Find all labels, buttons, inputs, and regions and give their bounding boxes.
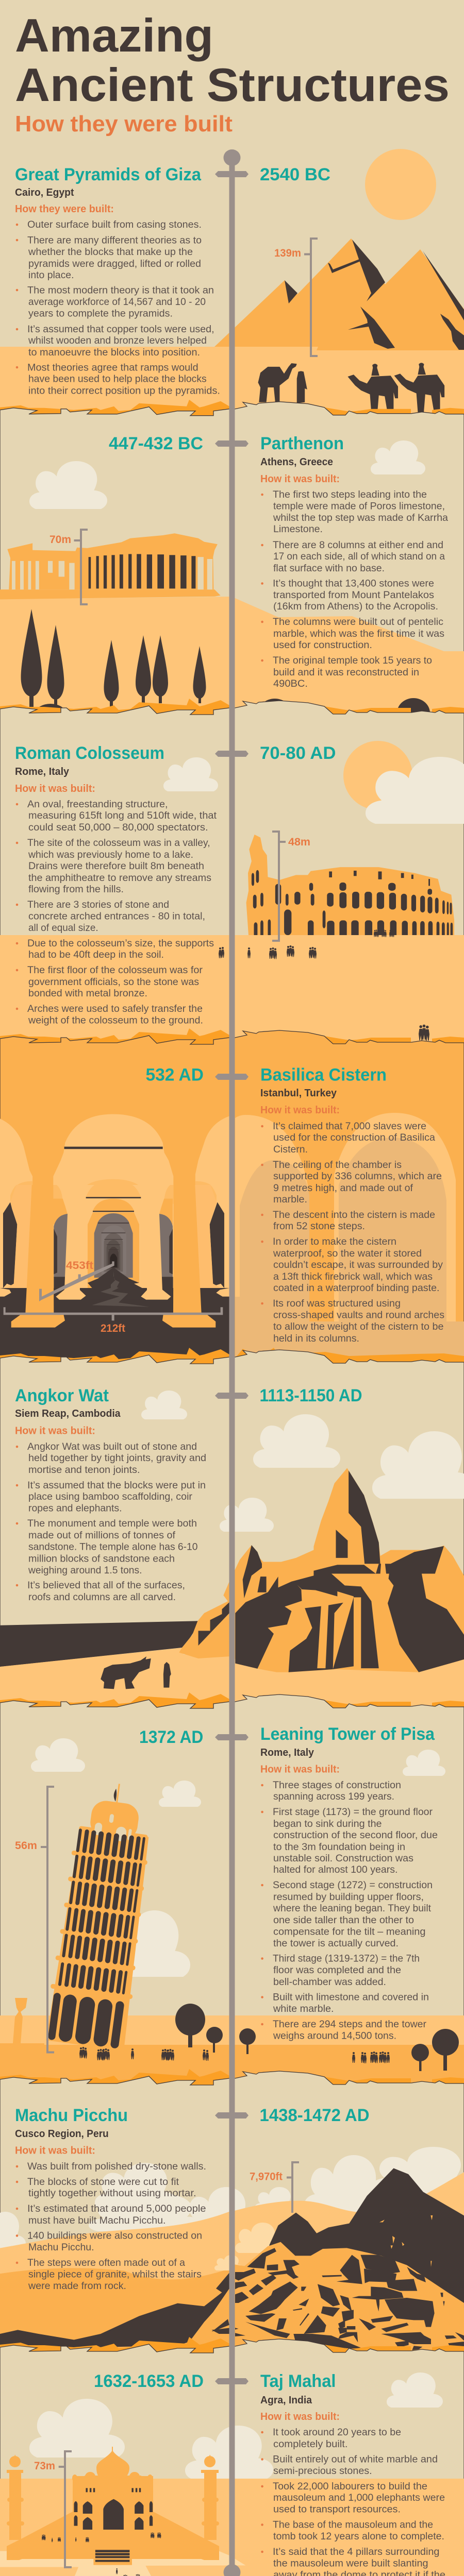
date: 532 AD (145, 1065, 204, 1085)
windows and stairs (74, 2488, 153, 2565)
bullet list: average workforce of 14,567 and 10 - 20 (28, 297, 206, 308)
subtitle: How they were built (15, 111, 233, 137)
tower (43, 1778, 160, 2051)
bullet list: The ceiling of the chamber is (273, 1160, 402, 1171)
height bracket: 48m: 48m (288, 836, 310, 848)
bullet list: Most theories agree that ramps would (27, 363, 198, 373)
bullet list: sandstone. The temple alone has 6-10 (28, 1542, 197, 1553)
illustration: Parthenon (0, 440, 464, 728)
colosseum building (246, 835, 454, 940)
arches right of timeline (235, 1113, 464, 1365)
bullet list: 17 on each side, all of which stand on a (273, 551, 445, 562)
height bracket: 73m: 73m (34, 2460, 55, 2472)
location: Athens, Greece (260, 456, 333, 468)
bullet list: place using bamboo scaffolding, coir (28, 1492, 193, 1502)
panel: Taj Mahal (94, 2371, 445, 2576)
dimension label: 453ft: 453ft (66, 1260, 93, 1272)
panel: Leaning Tower of Pisa (139, 1724, 438, 2041)
bullet list: It’s estimated that around 5,000 people (27, 2204, 206, 2214)
camels and travellers (258, 363, 444, 414)
cloud (31, 1738, 85, 1772)
right minaret (201, 2455, 219, 2540)
bullet list: where the leaning began. They built (273, 1903, 432, 1914)
cloud (371, 440, 425, 474)
upper arches left of timeline (0, 1114, 229, 1194)
height bracket: 139m: 139m (274, 247, 301, 259)
illustration: Leaning Tower of Pisa (0, 1738, 464, 2086)
ground strip (0, 2337, 464, 2355)
title: Amazing (15, 10, 213, 62)
bullet list: Second stage (1272) = construction (273, 1880, 433, 1891)
bullet list: Its roof was structured using (273, 1298, 401, 1309)
height bracket: 56m (15, 1786, 54, 2054)
bullet list: Machu Picchu. (28, 2242, 94, 2253)
bullet list: It’s assumed that copper tools were used, (27, 324, 214, 335)
height bracket: 70m: 70m (49, 534, 71, 546)
bullet list: into their correct position up the pyramids. (28, 386, 220, 397)
bullet list: It’s claimed that 7,000 slaves were (273, 1121, 426, 1132)
bullet list: the amphitheatre to remove any streams (28, 873, 211, 884)
bullet list: The descent into the cistern is made (273, 1210, 435, 1221)
bullet list: The columns were built out of pentelic (273, 617, 443, 628)
height bracket: 70m (49, 529, 88, 605)
bullet list: build and it was reconstructed in (273, 667, 419, 678)
hill ground (0, 597, 464, 721)
date: 1113-1150 AD (260, 1386, 362, 1405)
bullet list: temple were made of Poros limestone, (273, 501, 445, 512)
bullet list: The most modern theory is that it took an (27, 285, 214, 296)
heading: Machu Picchu (15, 2106, 128, 2125)
mausoleum (7, 2447, 219, 2560)
location: Agra, India (260, 2395, 312, 2406)
cloud (29, 461, 107, 509)
subheading: How they were built: (15, 204, 114, 215)
date: 1632-1653 AD (94, 2371, 204, 2391)
dimension lines (4, 1261, 223, 1320)
bullet list: spanning across 199 years. (273, 1791, 394, 1802)
bullet list: First stage (1173) = the ground floor (273, 1807, 433, 1818)
bullet list: the tower is actually curved. (273, 1938, 399, 1949)
pyramids (214, 239, 464, 350)
subheading: How it was built: (15, 783, 95, 794)
bullet list: Was built from polished dry-stone walls. (27, 2161, 206, 2172)
cloud (387, 2372, 443, 2408)
bushes (36, 698, 430, 728)
bullet list: single piece of granite, whilst the stairs (28, 2269, 202, 2280)
bullet list: completely built. (273, 2439, 347, 2450)
illustration: Taj Mahal (0, 2372, 464, 2576)
cloud (403, 1750, 445, 1776)
bullet list: weighs around 14,500 tons. (273, 2031, 396, 2041)
bullet list: Outer surface built from casing stones. (27, 219, 202, 230)
bullet list: It’s thought that 13,400 stones were (273, 578, 434, 589)
bullet list: flat surface with no base. (273, 563, 385, 574)
title: Ancient Structures (15, 59, 450, 111)
bullet list: construction of the second floor, due (273, 1830, 438, 1841)
bullet list: marble. (273, 1194, 307, 1205)
hall, columns and dimension lines (0, 1185, 229, 1365)
cloud (29, 2399, 125, 2458)
visitors (79, 2047, 390, 2063)
bullet list: ropes and elephants. (28, 1503, 122, 1514)
bullet list: had to be 40ft deep in the soil. (28, 950, 164, 960)
height bracket: 56m: 56m (15, 1840, 37, 1852)
panel: Angkor Wat (15, 1386, 362, 1603)
ground edge (0, 2339, 464, 2576)
bullet list: The first floor of the colosseum was for (27, 965, 203, 976)
bullet list: cross-shaped vaults and round arches (273, 1310, 444, 1321)
panel: Basilica Cistern (145, 1065, 444, 1344)
height bracket: 139m (274, 238, 318, 357)
height bracket: 7,970ft: 7,970ft (250, 2171, 283, 2182)
bullet list: one side taller than the other to (273, 1915, 414, 1926)
bullet list: The first two steps leading into the (273, 489, 427, 500)
bullet list: It’s assumed that the blocks were put in (27, 1480, 206, 1491)
bullet list (261, 2427, 445, 2576)
bullet list: The steps were often made out of a (27, 2258, 185, 2268)
bullet list: There are 294 steps and the tower (273, 2019, 427, 2030)
bullet list: Third stage (1319-1372) = the 7th (273, 1954, 420, 1964)
icon: sun (343, 741, 412, 810)
ground edge (0, 402, 464, 826)
bullet list: from 52 stone steps. (273, 1221, 365, 1232)
illustration: Basilica Cistern (0, 1113, 464, 1365)
ox and herder (101, 1656, 171, 1689)
bullet list: bell-chamber was added. (273, 1977, 386, 1988)
ground edge (0, 701, 464, 1125)
subheading: How it was built: (15, 1426, 95, 1437)
ground (0, 935, 464, 1046)
bullet list: have been used to help place the blocks (28, 374, 207, 385)
dimension label: 212ft: 212ft (101, 1323, 125, 1334)
cloud (366, 757, 464, 824)
bullet list: There are 3 stories of stone and (27, 900, 169, 910)
bullet list: bonded with metal bronze. (28, 988, 147, 999)
timeline (215, 149, 248, 2576)
bullet list: whilst wooden and bronze levers helped (28, 335, 207, 346)
panel: Roman Colosseum (15, 743, 336, 1026)
bullet list: Took 22,000 labourers to build the (273, 2481, 427, 2492)
ground edge (0, 1694, 464, 2119)
title (15, 10, 450, 111)
bullet list: held together by tight joints, gravity and (28, 1453, 206, 1464)
illustration: Angkor Wat (0, 1391, 464, 1714)
cloud (159, 1781, 201, 1807)
bullet list: flowing from the hills. (28, 884, 124, 895)
height bracket: 48m (272, 831, 310, 942)
bullet list: years to complete the pyramids. (28, 308, 173, 319)
heading: Great Pyramids of Giza (15, 165, 202, 184)
bullet list: supported by 336 columns, which are (273, 1171, 442, 1182)
bullet list (16, 2161, 206, 2292)
location: Cusco Region, Peru (15, 2128, 109, 2140)
location: Siem Reap, Cambodia (15, 1408, 121, 1419)
bullet list: Arches were used to safely transfer the (27, 1004, 203, 1014)
cloud (253, 1414, 340, 1468)
bullet list: could seat 50,000 – 80,000 spectators. (28, 822, 208, 833)
floor cracks (92, 1271, 150, 1307)
icon: sun (365, 149, 436, 220)
location: Rome, Italy (15, 766, 70, 777)
ground bands (0, 2015, 464, 2086)
bullet list: Due to the colosseum’s size, the supports (27, 938, 214, 949)
bullet list: marble, which was the first time it was (273, 629, 444, 639)
bullet list: It’s said that the 4 pillars surrounding (273, 2547, 439, 2557)
bullet list: must have built Machu Picchu. (28, 2215, 166, 2226)
bullet list: halted for almost 100 years. (273, 1865, 398, 1875)
bullet list: began to sink during the (273, 1819, 382, 1829)
bullet list: The original temple took 15 years to (273, 655, 432, 666)
cloud (185, 2426, 273, 2479)
bullet list: a 13ft thick firebrick wall, which was (273, 1272, 433, 1282)
subheading: How it was built: (260, 2411, 340, 2422)
bullet list: mortise and tenon joints. (28, 1465, 140, 1476)
location: Istanbul, Turkey (260, 1088, 337, 1099)
bullet list: semi-precious stones. (273, 2466, 372, 2477)
bullet list: transported from Mount Pantelakos (273, 590, 434, 601)
bullet list: the mausoleum were built slanting (273, 2558, 428, 2569)
bullet list: all of equal size. (28, 923, 98, 934)
date: 70-80 AD (260, 743, 336, 763)
ruins (234, 2215, 464, 2353)
heading: Parthenon (260, 434, 344, 453)
subheading: How it was built: (260, 1764, 340, 1775)
bullet list: to allow the weight of the cistern to be (273, 1321, 443, 1332)
bullet list: floor was completed and the (273, 1965, 401, 1976)
bullet list: unstable soil. Construction was (273, 1853, 413, 1864)
bullet list: waterproof, so the water it stored (273, 1248, 422, 1259)
mountain left (0, 2273, 237, 2348)
cloud (372, 1431, 464, 1499)
bullet list (16, 799, 217, 1026)
bullet list: pyramids were dragged, lifted or rolled (28, 259, 201, 269)
ground strip (0, 2069, 464, 2088)
bullet list: 140 buildings were also constructed on (27, 2231, 202, 2241)
temple (0, 533, 221, 599)
bullet list: used for the construction of Basilica (273, 1132, 435, 1143)
bullet list: mausoleum and 1,000 elephants were (273, 2493, 445, 2503)
bullet list (16, 1442, 206, 1603)
clouds (0, 2147, 464, 2250)
bullet list: used to transport resources. (273, 2504, 401, 2515)
bullet list (261, 1780, 438, 2041)
ground (0, 2479, 464, 2576)
bullet list: Limestone. (273, 524, 323, 535)
ground strip (0, 1028, 464, 1047)
bullet list: which was previously home to a lake. (28, 850, 193, 860)
illustration: Giza pyramids (0, 149, 464, 416)
illustration: Machu Picchu (0, 2147, 464, 2355)
bullet list: made out of millions of tonnes of (28, 1530, 176, 1541)
height bracket: 73m (34, 2450, 72, 2568)
panel: Great Pyramids of Giza (15, 165, 330, 397)
bullet list: 9 metres high, and made out of (273, 1183, 413, 1194)
bullet list (261, 1121, 444, 1344)
date: 1438-1472 AD (260, 2106, 369, 2125)
cloud (141, 1391, 187, 1419)
date: 447-432 BC (109, 434, 203, 453)
bullet list: coated in a waterproof binding paste. (273, 1283, 439, 1294)
heading: Angkor Wat (15, 1386, 109, 1405)
bullet list: concrete arched entrances - 80 in total, (28, 911, 205, 922)
bullet list: An oval, freestanding structure, (27, 799, 168, 810)
heading: Roman Colosseum (15, 743, 164, 763)
ground edge (0, 1030, 464, 1455)
ground strip (0, 1692, 464, 1711)
ground strip (0, 400, 464, 418)
bullet list: weight of the colosseum to the ground. (28, 1015, 203, 1026)
heading: Leaning Tower of Pisa (260, 1724, 435, 1744)
bullet list: There are many different theories as to (27, 235, 202, 246)
bullet list: roofs and columns are all carved. (28, 1592, 176, 1603)
bullet list: used for construction. (273, 640, 372, 651)
bullet list: into place. (28, 270, 74, 281)
heading: Basilica Cistern (260, 1065, 387, 1085)
distant column (0, 1998, 44, 2046)
subheading: How it was built: (260, 1105, 340, 1116)
height bracket: 7,970ft (250, 2161, 299, 2213)
ground edge (0, 2071, 464, 2496)
bullet list: couldn’t escape, it was surrounded by (273, 1260, 443, 1270)
pale clouds (214, 2223, 281, 2270)
bullet list: were made from rock. (28, 2281, 126, 2292)
bullet list: government officials, so the stone was (28, 977, 199, 988)
left minaret (7, 2455, 24, 2540)
ground strip (0, 1348, 464, 1366)
heading: Taj Mahal (260, 2371, 336, 2391)
subheading: How it was built: (15, 2145, 95, 2157)
bullet list: Three stages of construction (273, 1780, 401, 1791)
bullet list: compensate for the tilt – meaning (273, 1927, 426, 1937)
bullet list: tomb took 12 years alone to complete. (273, 2531, 444, 2542)
bullet list: Drains were therefore built 8m beneath (28, 861, 204, 872)
bullet list (261, 489, 448, 689)
bullet list: resumed by building upper floors, (273, 1892, 424, 1903)
bullet list: Built with limestone and covered in (273, 1992, 429, 2003)
cloud (220, 1498, 274, 1532)
bullet list: weighing around 1.5 tons. (28, 1565, 142, 1576)
visitors (219, 929, 429, 1041)
bullet list: The monument and temple were both (27, 1518, 197, 1529)
mountain right (269, 2168, 464, 2308)
bullet list: The base of the mausoleum and the (273, 2520, 433, 2531)
location: Rome, Italy (260, 1747, 314, 1758)
cloud (163, 757, 218, 791)
bullet list: The blocks of stone were cut to fit (27, 2177, 179, 2188)
ground edge (0, 1350, 464, 1774)
bullet list: In order to make the cistern (273, 1236, 396, 1247)
forecourt (0, 2551, 464, 2576)
round trees (175, 2004, 459, 2071)
desert ground (0, 347, 464, 416)
bullet list: Cistern. (273, 1144, 308, 1155)
ground strip (0, 699, 464, 717)
visitors (42, 2533, 161, 2576)
panel: Machu Picchu (15, 2106, 369, 2292)
bullet list: tightly together without using mortar. (28, 2188, 196, 2199)
bullet list: to manoeuvre the blocks into position. (28, 347, 200, 358)
bullet list: million blocks of sandstone each (28, 1554, 175, 1564)
hills (0, 2172, 464, 2355)
bullet list: There are 8 columns at either end and (273, 540, 443, 551)
bullet list: held in its columns. (273, 1333, 359, 1344)
bullet list: It took around 20 years to be (273, 2427, 401, 2438)
bullet list: The site of the colosseum was in a valley, (27, 838, 210, 849)
subheading: How it was built: (260, 473, 340, 485)
bullet list: It’s believed that all of the surfaces, (27, 1580, 185, 1591)
bullet list: whilst the top step was made of Karrha (273, 513, 448, 523)
date: 2540 BC (260, 165, 330, 184)
ground strip right (235, 1348, 464, 1365)
bullet list: Angkor Wat was built out of stone and (27, 1442, 197, 1452)
cypress trees (21, 609, 206, 713)
temple (0, 1468, 464, 1714)
panel: Parthenon (109, 434, 448, 689)
columns (0, 1185, 229, 1328)
bullet list: to the 3m foundation being in (273, 1842, 405, 1853)
bullet list (16, 219, 220, 397)
cloud (101, 1910, 190, 1977)
bullet list: Built entirely out of white marble and (273, 2454, 438, 2465)
bullet list: white marble. (273, 2004, 334, 2014)
bullet list: 490BC. (273, 679, 308, 689)
bullet list: (16km from Athens) to the Acropolis. (273, 601, 438, 612)
location: Cairo, Egypt (15, 187, 74, 198)
bullet list: measuring 615ft long and 510ft wide, that (28, 810, 217, 821)
date: 1372 AD (139, 1727, 203, 1747)
bullet list: whether the blocks that make up the (28, 247, 193, 258)
